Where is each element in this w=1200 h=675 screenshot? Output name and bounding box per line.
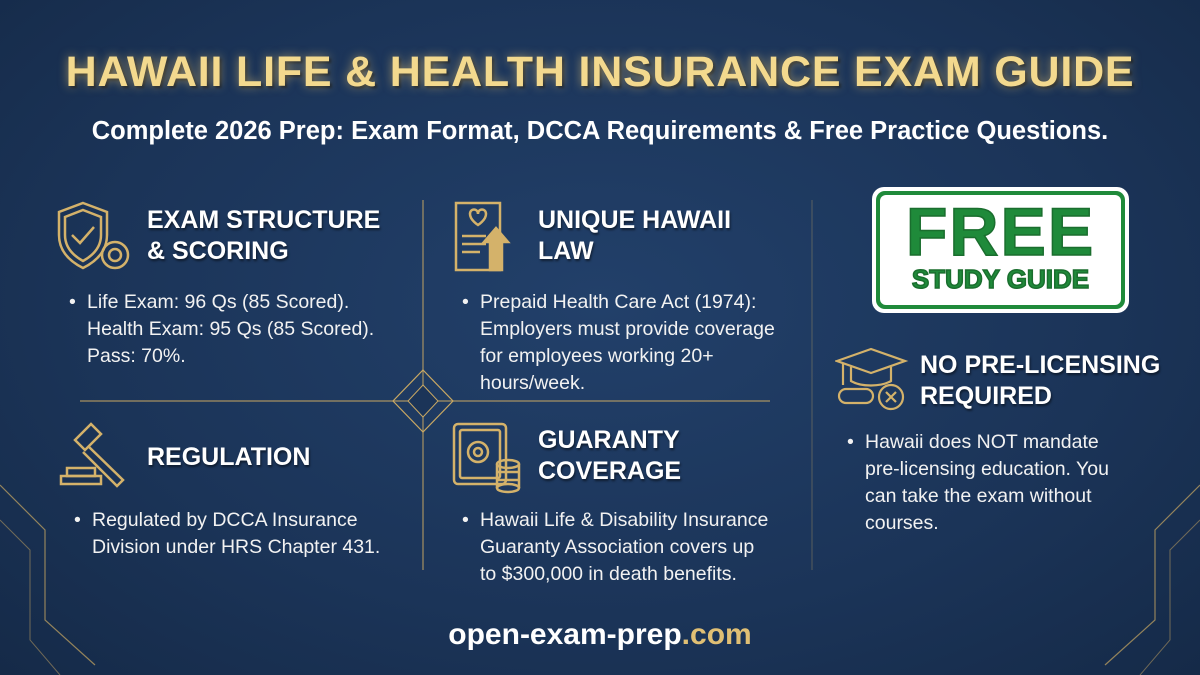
heading	[920, 351, 1161, 412]
panel: guaranty coverage: •	[462, 509, 469, 531]
panel: unique hawaii law: •	[462, 291, 469, 313]
bullets	[69, 291, 374, 367]
bullets: for employees working 20+	[480, 345, 714, 367]
panel: exam structure: •	[69, 291, 76, 313]
panel: unique hawaii law	[454, 202, 775, 394]
heading: LAW	[538, 237, 594, 265]
title: HAWAII LIFE & HEALTH INSURANCE EXAM GUIDE	[66, 48, 1134, 96]
heading: & SCORING	[147, 237, 289, 265]
badge: free study guide: FREE	[906, 194, 1095, 270]
heading	[538, 206, 732, 265]
heading: REGULATION	[147, 443, 310, 471]
heading	[538, 426, 682, 485]
bullets: can take the exam without	[865, 485, 1092, 507]
heading: EXAM STRUCTURE	[147, 206, 380, 234]
bullets	[74, 509, 380, 558]
bullets: Employers must provide coverage	[480, 318, 775, 340]
heading	[147, 206, 381, 265]
bullets: Prepaid Health Care Act (1974):	[480, 291, 756, 313]
badge: free study guide: STUDY GUIDE	[912, 264, 1089, 294]
heading: NO PRE-LICENSING	[920, 351, 1160, 379]
bullets: pre-licensing education. You	[865, 458, 1109, 480]
bullets	[462, 509, 768, 585]
heading: COVERAGE	[538, 457, 681, 485]
bullets: Guaranty Association covers up	[480, 536, 754, 558]
panel: guaranty coverage	[452, 422, 768, 585]
bullets: Hawaii Life & Disability Insurance	[480, 509, 768, 531]
bullets: Regulated by DCCA Insurance	[92, 509, 358, 531]
subtitle: Complete 2026 Prep: Exam Format, DCCA Requirements & Free Practice Questions.	[92, 117, 1108, 145]
icon: gavel	[60, 422, 125, 488]
heading: GUARANTY	[538, 426, 680, 454]
panel: no pre-licensing: •	[847, 431, 854, 453]
badge: free study guide	[872, 187, 1129, 313]
heading: UNIQUE HAWAII	[538, 206, 731, 234]
panel: regulation: •	[74, 509, 81, 531]
bullets: courses.	[865, 512, 939, 534]
panel: no pre-licensing	[835, 348, 1161, 534]
icon: document	[454, 202, 511, 272]
panel: regulation	[60, 422, 380, 558]
bullets	[462, 291, 775, 394]
bullets: Pass: 70%.	[87, 345, 186, 367]
bullets: to $300,000 in death benefits.	[480, 563, 737, 585]
bullets: Life Exam: 96 Qs (85 Scored).	[87, 291, 349, 313]
bullets: hours/week.	[480, 372, 585, 394]
bullets: Hawaii does NOT mandate	[865, 431, 1099, 453]
icon: safe and coins	[452, 422, 520, 494]
panel: exam structure	[58, 202, 381, 367]
bullets: Division under HRS Chapter 431.	[92, 536, 380, 558]
bullets	[847, 431, 1109, 534]
icon: shield gear	[58, 202, 130, 270]
footer url: open-exam-prep.com	[448, 618, 752, 651]
bullets: Health Exam: 95 Qs (85 Scored).	[87, 318, 374, 340]
heading: REQUIRED	[920, 382, 1052, 410]
icon: graduation cap	[835, 348, 908, 410]
